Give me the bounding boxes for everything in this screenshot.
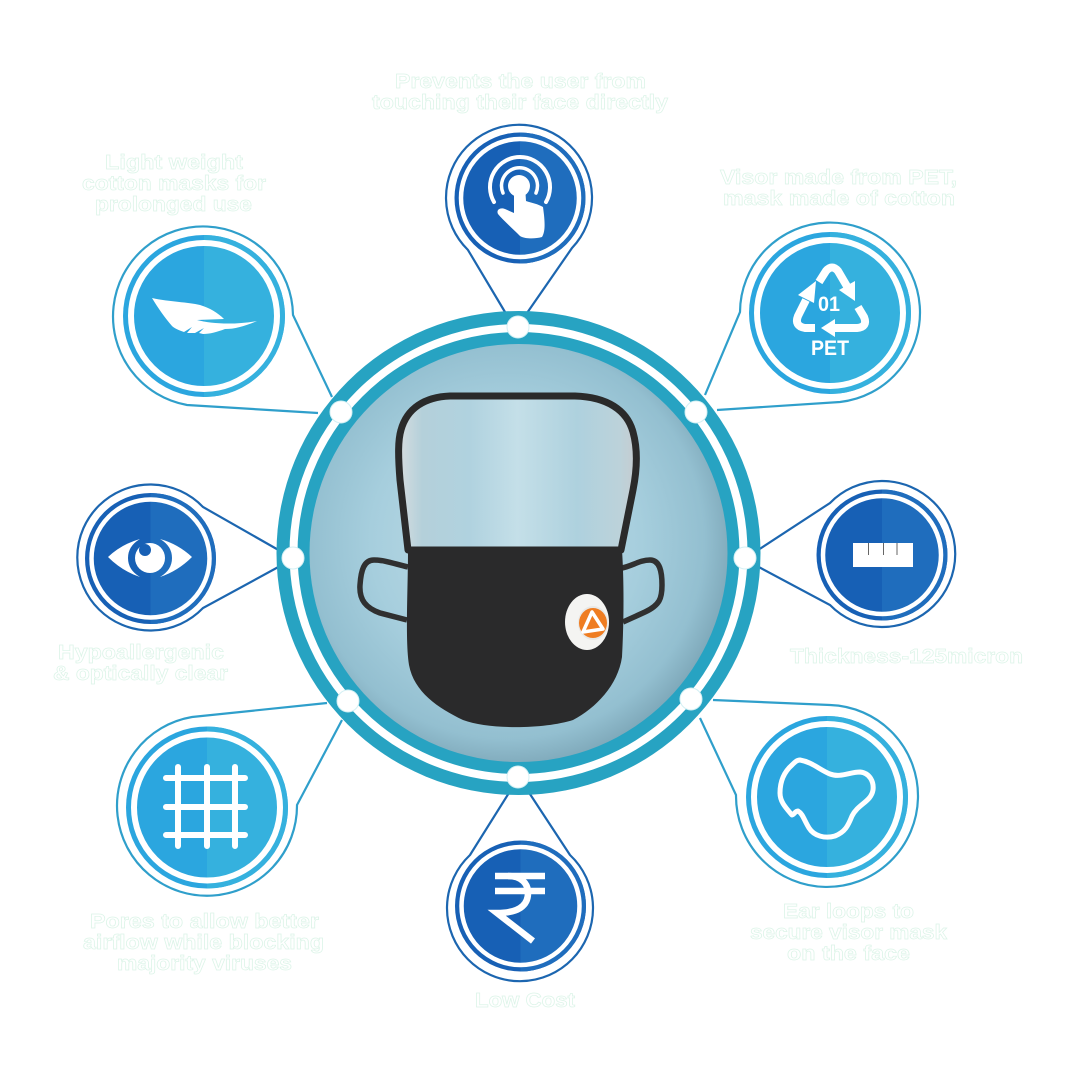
icon: ruler <box>853 543 913 567</box>
product: visor mask <box>360 396 662 727</box>
icon: finger tap <box>490 157 550 238</box>
panel: pin outlines <box>77 125 955 981</box>
mask body <box>407 550 624 727</box>
text: light weight <box>82 152 266 216</box>
text: ear loops: secure visor mask <box>750 922 948 944</box>
visor <box>399 396 636 550</box>
icon: rupee symbol <box>495 876 545 941</box>
text: pores: majority viruses <box>117 953 292 975</box>
text: pores <box>83 911 324 975</box>
text: light weight: cotton masks for <box>82 173 266 195</box>
text: hypoallergenic <box>53 642 228 685</box>
badge: PET <box>749 232 911 394</box>
icon: recycling triangle <box>797 268 865 360</box>
badge: ear loops <box>746 716 908 878</box>
icon: eye <box>108 539 192 577</box>
icon: recycling triangle: 01 <box>818 293 840 316</box>
text: visor material: mask made of cotton <box>723 188 955 210</box>
text: pores: Pores to allow better <box>90 911 319 933</box>
icon: ear loop outline <box>780 760 873 837</box>
badge: eye <box>85 493 216 624</box>
text: prevents touching: Prevents the user from <box>395 71 646 93</box>
text: thickness: Thickness-125micron <box>790 646 1023 668</box>
text: light weight: Light weight <box>105 152 243 174</box>
text: visor material <box>720 167 957 210</box>
text: light weight: prolonged use <box>95 194 252 216</box>
text: pores: airflow while blocking <box>83 932 324 954</box>
badge: feather <box>123 235 285 397</box>
text: hypoallergenic: & optically clear <box>53 663 228 685</box>
text: prevents touching <box>372 71 669 114</box>
ear loops <box>360 560 662 622</box>
text: ear loops: on the face <box>787 943 910 965</box>
text: ear loops: Ear loops to <box>783 901 914 923</box>
panel: central hub <box>276 311 760 795</box>
text: hypoallergenic: Hypoallergenic <box>58 642 224 664</box>
text: visor material: Visor made from PET, <box>720 167 957 189</box>
badge: pores <box>126 726 288 888</box>
icon: recycling triangle: PET <box>811 337 849 360</box>
badge: ruler <box>816 490 948 620</box>
text: low cost: Low Cost <box>475 990 575 1012</box>
badge: rupee <box>455 840 586 972</box>
text: prevents touching: touching their face directly <box>372 92 669 114</box>
connector dots <box>282 316 756 788</box>
mask valve badge <box>565 594 609 650</box>
badge: touch <box>454 132 586 264</box>
text: ear loops <box>750 901 948 965</box>
icon: mesh grid <box>166 767 245 846</box>
icon: feather <box>152 298 257 334</box>
